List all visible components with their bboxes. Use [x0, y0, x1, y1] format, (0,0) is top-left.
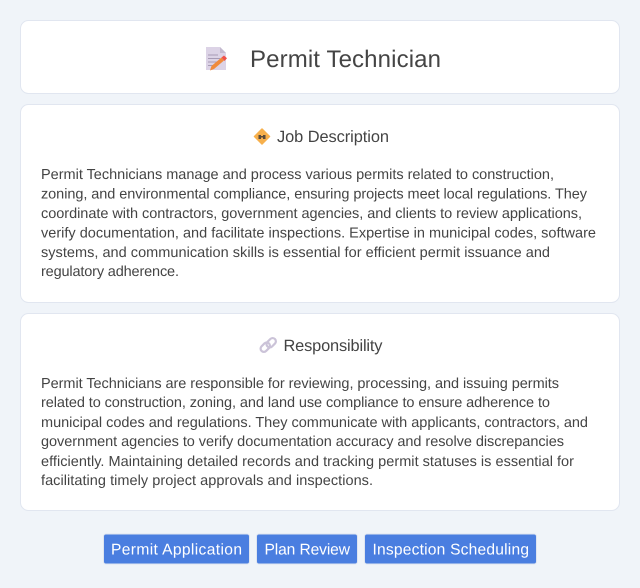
text block: responsibility: efficiently. Maintaining detailed records and tracking permit statuses is essential for: [41, 454, 574, 470]
tag row: [104, 534, 536, 564]
icon: orange diamond sign: [254, 129, 270, 144]
text block: responsibility: [41, 376, 588, 489]
text block: job description: verify documentation, and facilitate inspections. Expertise in municipal codes, software: [41, 226, 596, 242]
text block: job description: Permit Technicians manage and process various permits related to construction,: [41, 167, 554, 183]
tag: inspection scheduling: Inspection Scheduling: [372, 542, 529, 558]
heading: responsibility: Responsibility: [284, 337, 383, 355]
text block: responsibility: Permit Technicians are responsible for reviewing, processing, and issuing permits: [41, 376, 559, 392]
text block: job description: zoning, and environmental compliance, ensuring projects meet local regulations. They: [41, 186, 588, 202]
tag: inspection scheduling: [364, 534, 536, 564]
text block: job description: [41, 167, 596, 280]
tag: permit application: [104, 534, 250, 564]
tag: plan review: Plan Review: [264, 542, 351, 558]
panel: header: [20, 20, 620, 94]
heading: job description: Job Description: [277, 128, 389, 146]
text block: responsibility: municipal codes and regulations. They communicate with applicants, contractors, and: [41, 415, 588, 431]
text block: responsibility: related to construction, zoning, and land use compliance to ensure adherence to: [41, 395, 550, 411]
panel: job description: [20, 104, 620, 302]
text block: responsibility: government agencies to verify documentation accuracy and resolve discrepancies: [41, 434, 564, 450]
text block: job description: systems, and communication skills is essential for efficient permit issuance and: [41, 245, 550, 261]
icon: document with pencil: [206, 47, 227, 70]
text block: job description: coordinate with contractors, government agencies, and clients to review applications,: [41, 206, 582, 222]
text block: job description: regulatory adherence.: [41, 264, 179, 280]
tag: plan review: [256, 534, 358, 564]
panel: responsibility: [20, 314, 620, 510]
icon: chain link: [259, 337, 277, 353]
text block: responsibility: facilitating timely project approvals and inspections.: [41, 473, 373, 489]
tag: permit application: Permit Application: [111, 542, 242, 558]
title: Permit Technician: [250, 46, 441, 73]
